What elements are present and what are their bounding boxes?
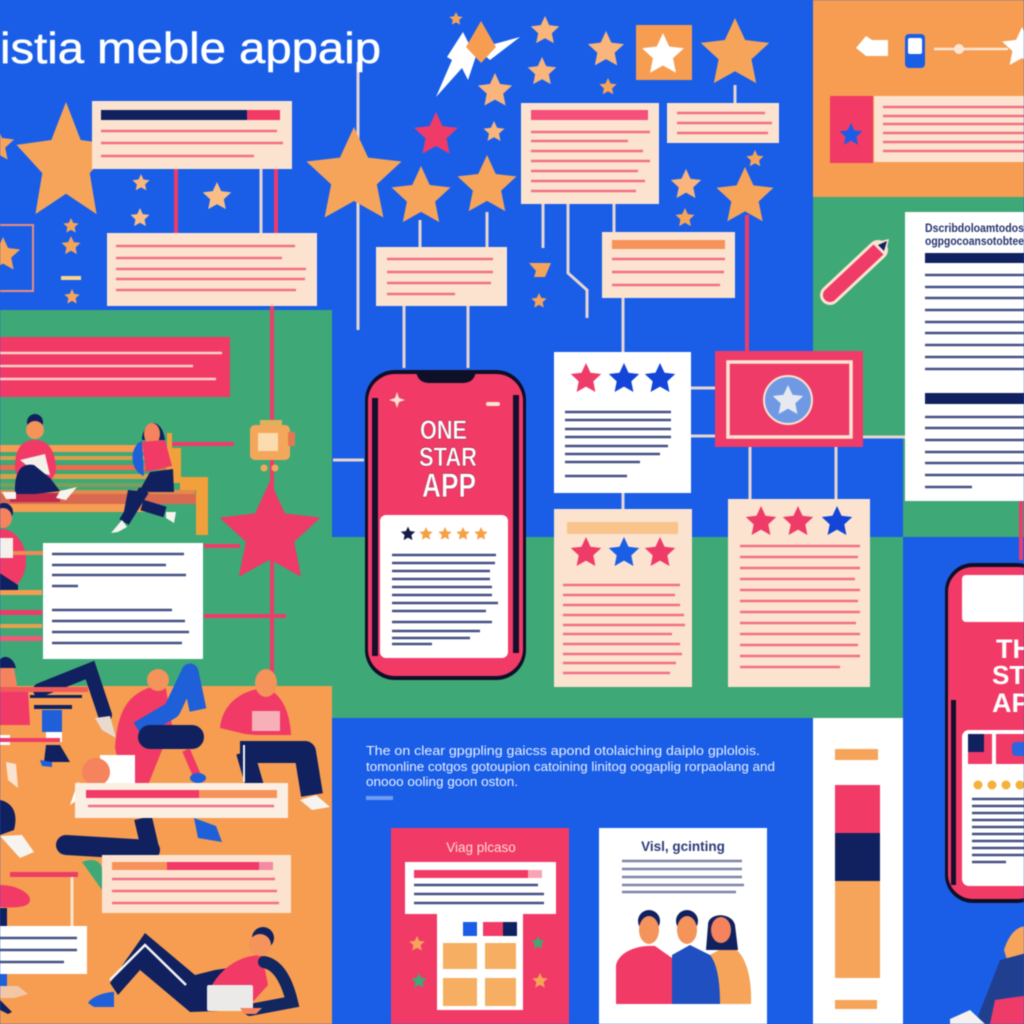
- title: istia meble appaip: [0, 24, 381, 73]
- text box F: [602, 232, 735, 298]
- phone: one star app: ONE: [420, 415, 467, 445]
- callout H: [75, 783, 288, 818]
- star: pink: [414, 112, 458, 154]
- icon: lightning bolt: [436, 21, 520, 97]
- paragraph on blue: [366, 743, 775, 800]
- white text box on green: [43, 543, 203, 659]
- paragraph on blue: The on clear gpgpling gaicss apond otolaiching daiplo gplolois.: [366, 743, 760, 758]
- top right icons: [856, 27, 1024, 68]
- text panel right: [905, 212, 1024, 501]
- person on bench right: [111, 423, 176, 533]
- phone: one star app: APP: [422, 467, 476, 505]
- white card with three people: Visl, gcinting: [641, 839, 725, 854]
- review card 2: [554, 509, 692, 687]
- person reclining centre orange panel: [0, 755, 222, 890]
- icon: small robot gadget: [250, 420, 295, 472]
- pink banner: [0, 337, 230, 397]
- phone: one star app: [365, 370, 526, 680]
- person left edge with laptop: [0, 503, 43, 641]
- white column with colour bars: [813, 718, 903, 1024]
- panel: green centre band: [332, 537, 903, 718]
- text box B: [107, 233, 317, 306]
- phone: partial right: [945, 563, 1024, 903]
- woman bottom right: [950, 926, 1024, 1024]
- pink card: [391, 828, 569, 1024]
- callout with blue star: [830, 96, 1024, 163]
- icon: pencil: [830, 239, 889, 295]
- person top left orange panel: [0, 657, 116, 788]
- text box A: [92, 101, 292, 169]
- panel: orange top right: [813, 0, 1024, 197]
- callout I: [102, 855, 291, 913]
- person right orange panel: [220, 669, 330, 810]
- bench: [0, 433, 208, 535]
- paragraph on blue: onooo ooling goon oston.: [366, 774, 518, 789]
- white card with three people: [599, 828, 767, 1024]
- text box E: [667, 103, 779, 143]
- text box D: [521, 103, 659, 204]
- person lying bottom orange panel: [88, 927, 292, 1014]
- phone: one star app: STAR: [419, 442, 477, 472]
- callout J with stool: [0, 872, 87, 1014]
- panel: orange bottom left: [0, 686, 332, 1024]
- star: large pink: [220, 481, 320, 577]
- red star badge: [715, 351, 863, 447]
- framed star left: [0, 225, 33, 291]
- paragraph on blue: tomonline cotgos gotoupion catoining linitog oogaplig rorpaolang and: [366, 759, 775, 774]
- framed white star: [636, 25, 692, 80]
- review card 1: [554, 352, 691, 493]
- connector lines: [170, 62, 1021, 680]
- person centre orange panel: [115, 669, 206, 790]
- pink card: Viag plcaso: [446, 840, 516, 855]
- panel: green left: [0, 310, 332, 690]
- orange stars top: [0, 12, 774, 307]
- review card 3: [728, 499, 870, 687]
- text box C: [376, 247, 507, 306]
- panel: green right: [813, 197, 1024, 537]
- person on bench left: [2, 414, 77, 500]
